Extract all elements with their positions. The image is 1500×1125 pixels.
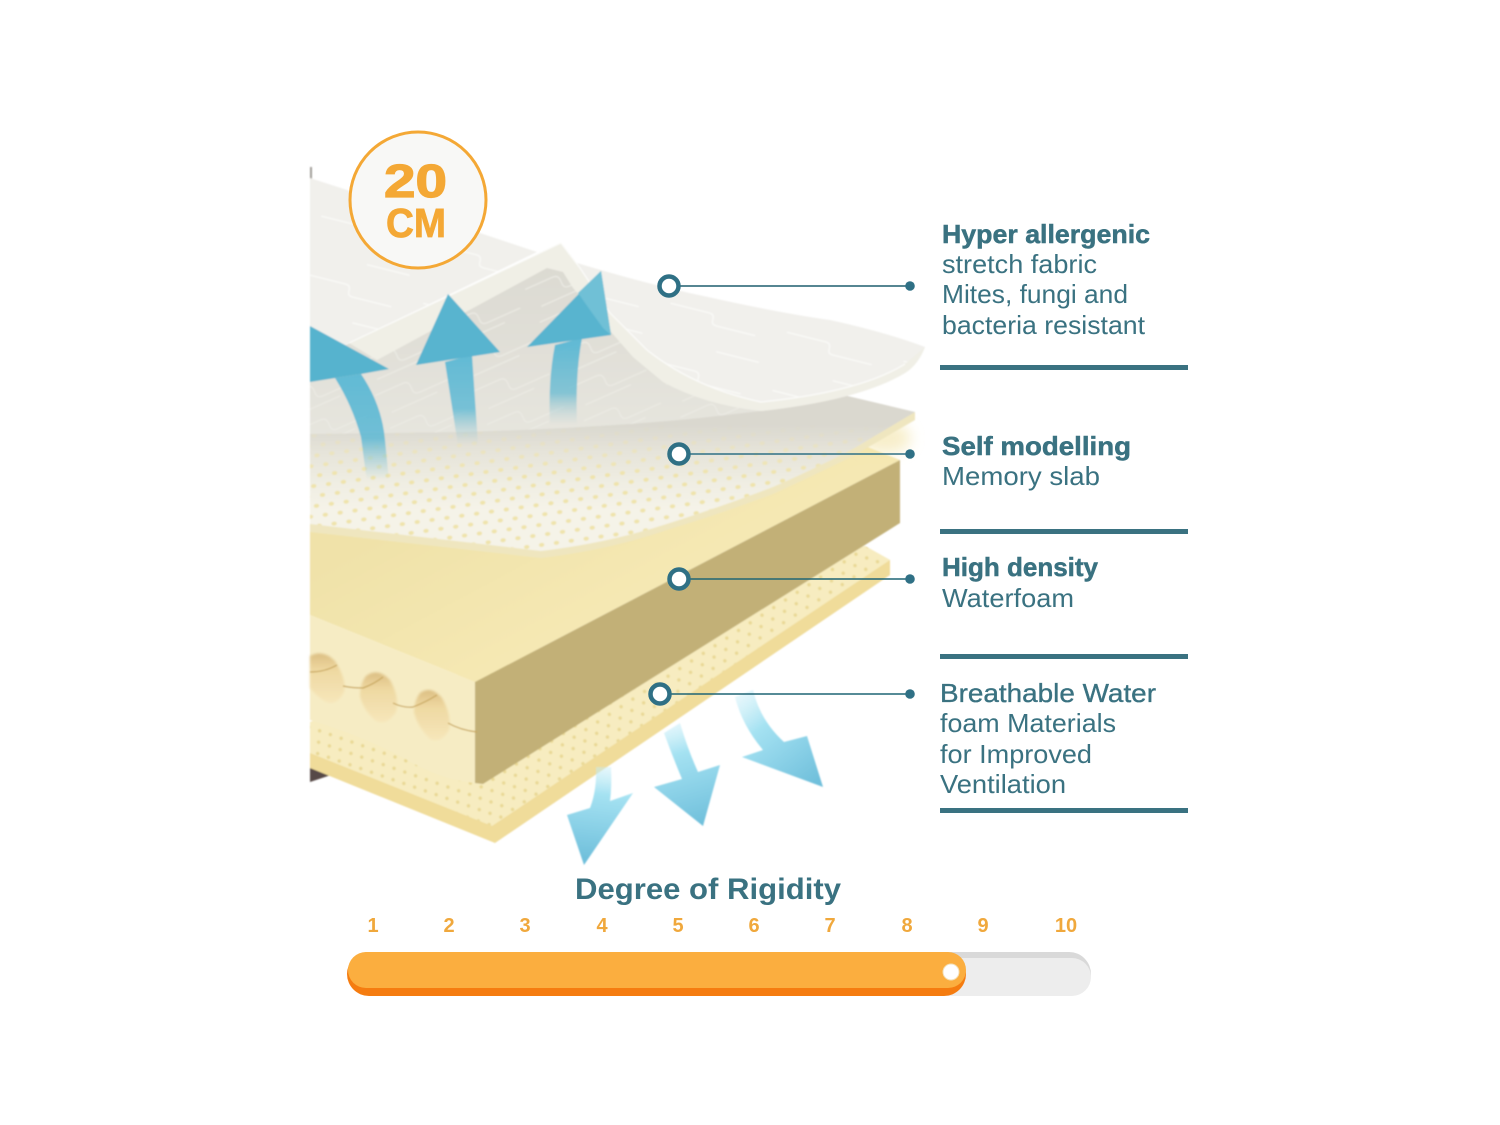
- text block: breathable: for Improved: [940, 739, 1092, 769]
- rigidity bar: [347, 952, 1091, 996]
- text block: breathable: [940, 678, 1156, 799]
- arrow down right: [735, 690, 823, 787]
- arrow up left: [310, 326, 389, 482]
- scale numbers: 1: [367, 915, 379, 937]
- text block: hyper allergenic: [942, 219, 1150, 340]
- scale numbers: [367, 915, 1077, 937]
- top-left sliver: [310, 167, 312, 179]
- scale numbers: 2: [443, 915, 455, 937]
- scale numbers: 3: [519, 915, 531, 937]
- layer: hyper allergenic fabric underside: [310, 243, 761, 434]
- text block: hyper allergenic: Mites, fungi and: [942, 279, 1128, 309]
- arrow up centre: [416, 294, 500, 445]
- scale numbers: 4: [596, 915, 608, 937]
- text block: high density: High density: [942, 552, 1099, 582]
- glow behind memory slab: [859, 422, 911, 454]
- scale numbers: 8: [901, 915, 913, 937]
- text block: self modelling: Memory slab: [942, 461, 1100, 491]
- text block: hyper allergenic: Hyper allergenic: [942, 219, 1150, 249]
- folded rim: [349, 243, 925, 411]
- text block: high density: Waterfoam: [942, 583, 1074, 613]
- divider 2: [940, 529, 1188, 534]
- scale numbers: 7: [824, 915, 836, 937]
- scale numbers: 10: [1055, 915, 1077, 937]
- callout leader: memory slab: [670, 444, 915, 464]
- text block: hyper allergenic: bacteria resistant: [942, 310, 1146, 340]
- arrow up right: [527, 271, 611, 425]
- layer: self modelling memory slab: [310, 380, 915, 558]
- dark base corner: [310, 767, 331, 782]
- badge: 20 CM: CM: [386, 200, 446, 246]
- scale numbers: 9: [977, 915, 989, 937]
- foam holes: [310, 653, 477, 740]
- divider 4: [940, 808, 1188, 813]
- bar fill: [347, 952, 966, 996]
- text block: self modelling: [942, 431, 1131, 491]
- arrow down centre: [654, 723, 720, 826]
- text block: self modelling: Self modelling: [942, 431, 1131, 461]
- text block: breathable: Breathable Water: [940, 678, 1156, 708]
- bar marker: [943, 964, 959, 980]
- scale numbers: 6: [748, 915, 760, 937]
- arrow down left: [567, 767, 633, 865]
- scale numbers: 5: [672, 915, 684, 937]
- text block: hyper allergenic: stretch fabric: [942, 249, 1097, 279]
- layer: hyper allergenic fabric top: [310, 178, 925, 411]
- divider 3: [940, 654, 1188, 659]
- layer: breathable bottom slab: [310, 546, 890, 843]
- heading: degree of rigidity: Degree of Rigidity: [575, 873, 841, 906]
- callout leader: breathable slab: [650, 684, 915, 704]
- text block: breathable: foam Materials: [940, 708, 1116, 738]
- layer: high density waterfoam block: [310, 440, 900, 784]
- divider 1: [940, 365, 1188, 370]
- bar track: [700, 952, 1091, 996]
- callout leader: waterfoam: [670, 570, 915, 588]
- badge: 20 CM: [350, 132, 486, 268]
- text block: breathable: Ventilation: [940, 769, 1066, 799]
- text block: high density: [942, 552, 1099, 613]
- badge: 20 CM: 20: [384, 155, 447, 207]
- mattress illustration: [310, 167, 925, 865]
- callout leader: fabric: [660, 276, 915, 296]
